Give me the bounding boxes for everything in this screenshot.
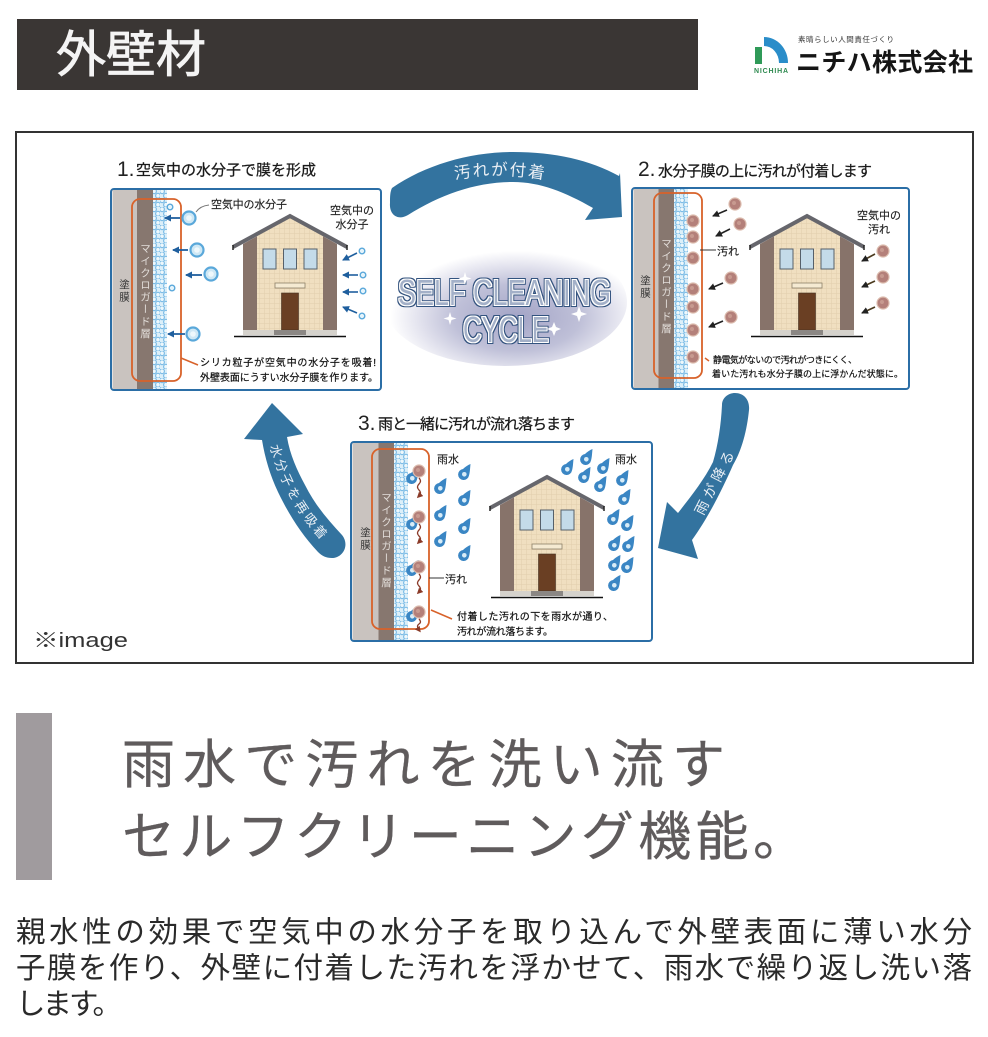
arrow: 雨が降る (658, 393, 749, 559)
wall cross-section (634, 189, 702, 388)
dirt on wall (687, 215, 699, 363)
headline: 雨水で汚れを洗い流す (122, 736, 725, 795)
step 3 title (358, 412, 575, 435)
step 2 title (638, 158, 872, 181)
step 2 title: 水分子膜の上に汚れが付着します (658, 163, 872, 180)
headline: セルフクリーニング機能。 (122, 808, 806, 867)
panel box (351, 442, 652, 641)
arrow: 水分子を再吸着 (244, 403, 346, 558)
label: 汚れ (429, 573, 467, 586)
caption (431, 610, 613, 638)
water molecules on wall (165, 204, 218, 340)
headline (122, 736, 806, 867)
label: 雨水: 雨水 (437, 453, 459, 466)
label: 空気中の水分子 (house): 水分子 (336, 218, 368, 231)
label: 空気中の水分子 (house): 空気中の (330, 205, 374, 217)
house illustration (750, 216, 864, 336)
step 1 title: 空気中の水分子で膜を形成 (136, 162, 316, 179)
body text: 子膜を作り、外壁に付着した汚れを浮かせて、雨水で繰り返し洗い落 (16, 952, 972, 985)
wall cross-section: マイクロガード層 (380, 492, 392, 589)
centre logo: self cleaning cycle (383, 238, 627, 366)
caption (705, 354, 903, 379)
label: 空気中の汚れ: 汚れ (868, 223, 890, 236)
wall cross-section: 塗膜 (639, 275, 651, 300)
step 1 title: 1. (117, 158, 135, 181)
panel 3 (351, 412, 652, 641)
wall cross-section: 塗膜 (118, 279, 130, 304)
arrow: 雨が降る: 雨が降る (691, 444, 739, 517)
dirt in the air (709, 198, 746, 327)
panel box (111, 189, 381, 390)
logo tagline: 素晴らしい人間責任づくり (798, 34, 894, 44)
label: 汚れ (700, 245, 739, 258)
heading: 外壁材: 外壁材 (56, 27, 206, 83)
arrow: 汚れが付着: 汚れが付着 (454, 161, 544, 180)
caption: シリカ粒子が空気中の水分子を吸着! (200, 356, 376, 369)
house illustration (233, 216, 347, 336)
caption: 着いた汚れも水分子膜の上に浮かんだ状態に。 (712, 368, 903, 379)
note: image: ※image (33, 630, 128, 652)
panel 1 (111, 158, 381, 390)
arrow: 水分子を再吸着: 水分子を再吸着 (270, 444, 328, 539)
icon: Nichiha mark (754, 37, 788, 75)
label: 汚れ: 汚れ (717, 245, 739, 258)
house illustration (490, 477, 604, 598)
caption: 汚れが流れ落ちます。 (457, 625, 553, 638)
body text: します。 (16, 988, 122, 1021)
body text: 親水性の効果で空気中の水分子を取り込んで外壁表面に薄い水分 (16, 916, 972, 949)
logo: Nichiha (754, 34, 973, 77)
label: 空気中の汚れ: 空気中の (857, 210, 901, 222)
step 2 title: 2. (638, 158, 656, 181)
step 3 title: 雨と一緒に汚れが流れ落ちます (378, 416, 575, 433)
label: 雨水 (house): 雨水 (615, 453, 637, 466)
caption: 付着した汚れの下を雨水が通り、 (457, 610, 613, 623)
step 3 title: 3. (358, 412, 376, 435)
icon: Nichiha mark: NICHIHA (754, 68, 788, 75)
header bar (17, 19, 698, 90)
diagram frame (15, 131, 974, 664)
caption: 静電気がないので汚れがつきにくく、 (713, 354, 857, 365)
rain drops right (561, 449, 634, 591)
panel box (632, 188, 909, 389)
panel 2 (632, 158, 909, 389)
centre logo: self cleaning cycle: CYCLE (463, 309, 549, 350)
label: 汚れ: 汚れ (445, 573, 467, 586)
wall cross-section: マイクロガード層 (139, 243, 151, 340)
grey accent block (16, 713, 52, 880)
wall cross-section: マイクロガード層 (660, 238, 672, 335)
caption: 外壁表面にうすい水分子膜を作ります。 (200, 372, 378, 384)
caption (181, 356, 378, 384)
wall cross-section (352, 443, 429, 640)
rain drops left (434, 464, 470, 561)
label: 空気中の水分子: 空気中の水分子 (211, 197, 287, 211)
wall cross-section: 塗膜 (359, 527, 371, 552)
logo company name: ニチハ株式会社 (796, 49, 973, 77)
dirt near house (862, 245, 889, 313)
body text (16, 916, 972, 1021)
wall cross-section (112, 190, 181, 389)
centre logo: self cleaning cycle: SELF CLEANING (398, 272, 611, 313)
step 1 title (117, 158, 316, 181)
arrow: 汚れが付着 (390, 152, 622, 220)
dirt washed by rain (406, 465, 425, 630)
water molecules near house (343, 248, 366, 319)
